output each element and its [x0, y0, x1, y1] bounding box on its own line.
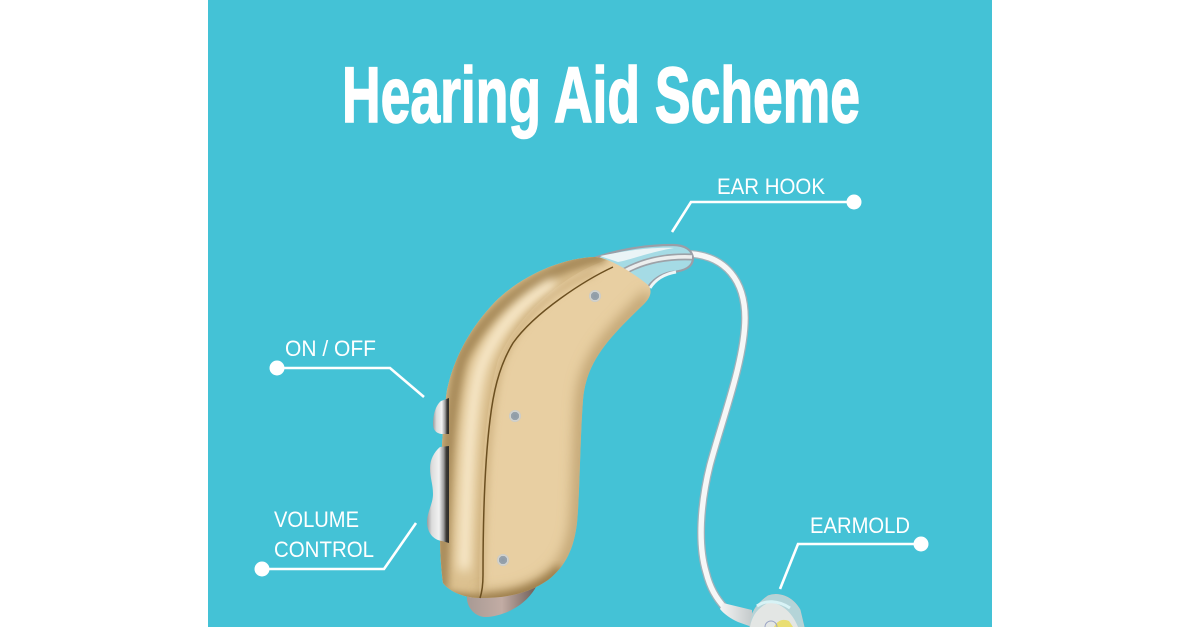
- callout: volume control: VOLUME: [274, 507, 359, 532]
- earmold: [750, 595, 804, 627]
- ear hook: [597, 245, 693, 290]
- on/off button: [433, 398, 449, 434]
- screw top: [589, 290, 601, 302]
- callout: ear hook: [672, 174, 862, 232]
- infographic canvas: [208, 0, 992, 627]
- bottom foot: [467, 585, 537, 617]
- earmold connector: [720, 603, 752, 627]
- screw middle: [509, 410, 521, 422]
- callout: earmold: EARMOLD: [810, 513, 910, 538]
- background panel: [208, 0, 992, 627]
- callout: volume control: CONTROL: [274, 537, 374, 562]
- screw bottom: [497, 554, 509, 566]
- callout: on / off: [270, 336, 424, 397]
- volume control button: [427, 446, 449, 543]
- callout: volume control: [254, 507, 416, 576]
- callout: on / off: ON / OFF: [285, 336, 376, 361]
- body shell: [440, 257, 650, 598]
- callout: earmold: [780, 513, 928, 589]
- callout: ear hook: EAR HOOK: [717, 174, 825, 199]
- seam line: [480, 267, 613, 598]
- hearing aid device: [427, 240, 804, 627]
- title: Hearing Aid Scheme: [342, 50, 860, 139]
- ear tube: [692, 254, 745, 608]
